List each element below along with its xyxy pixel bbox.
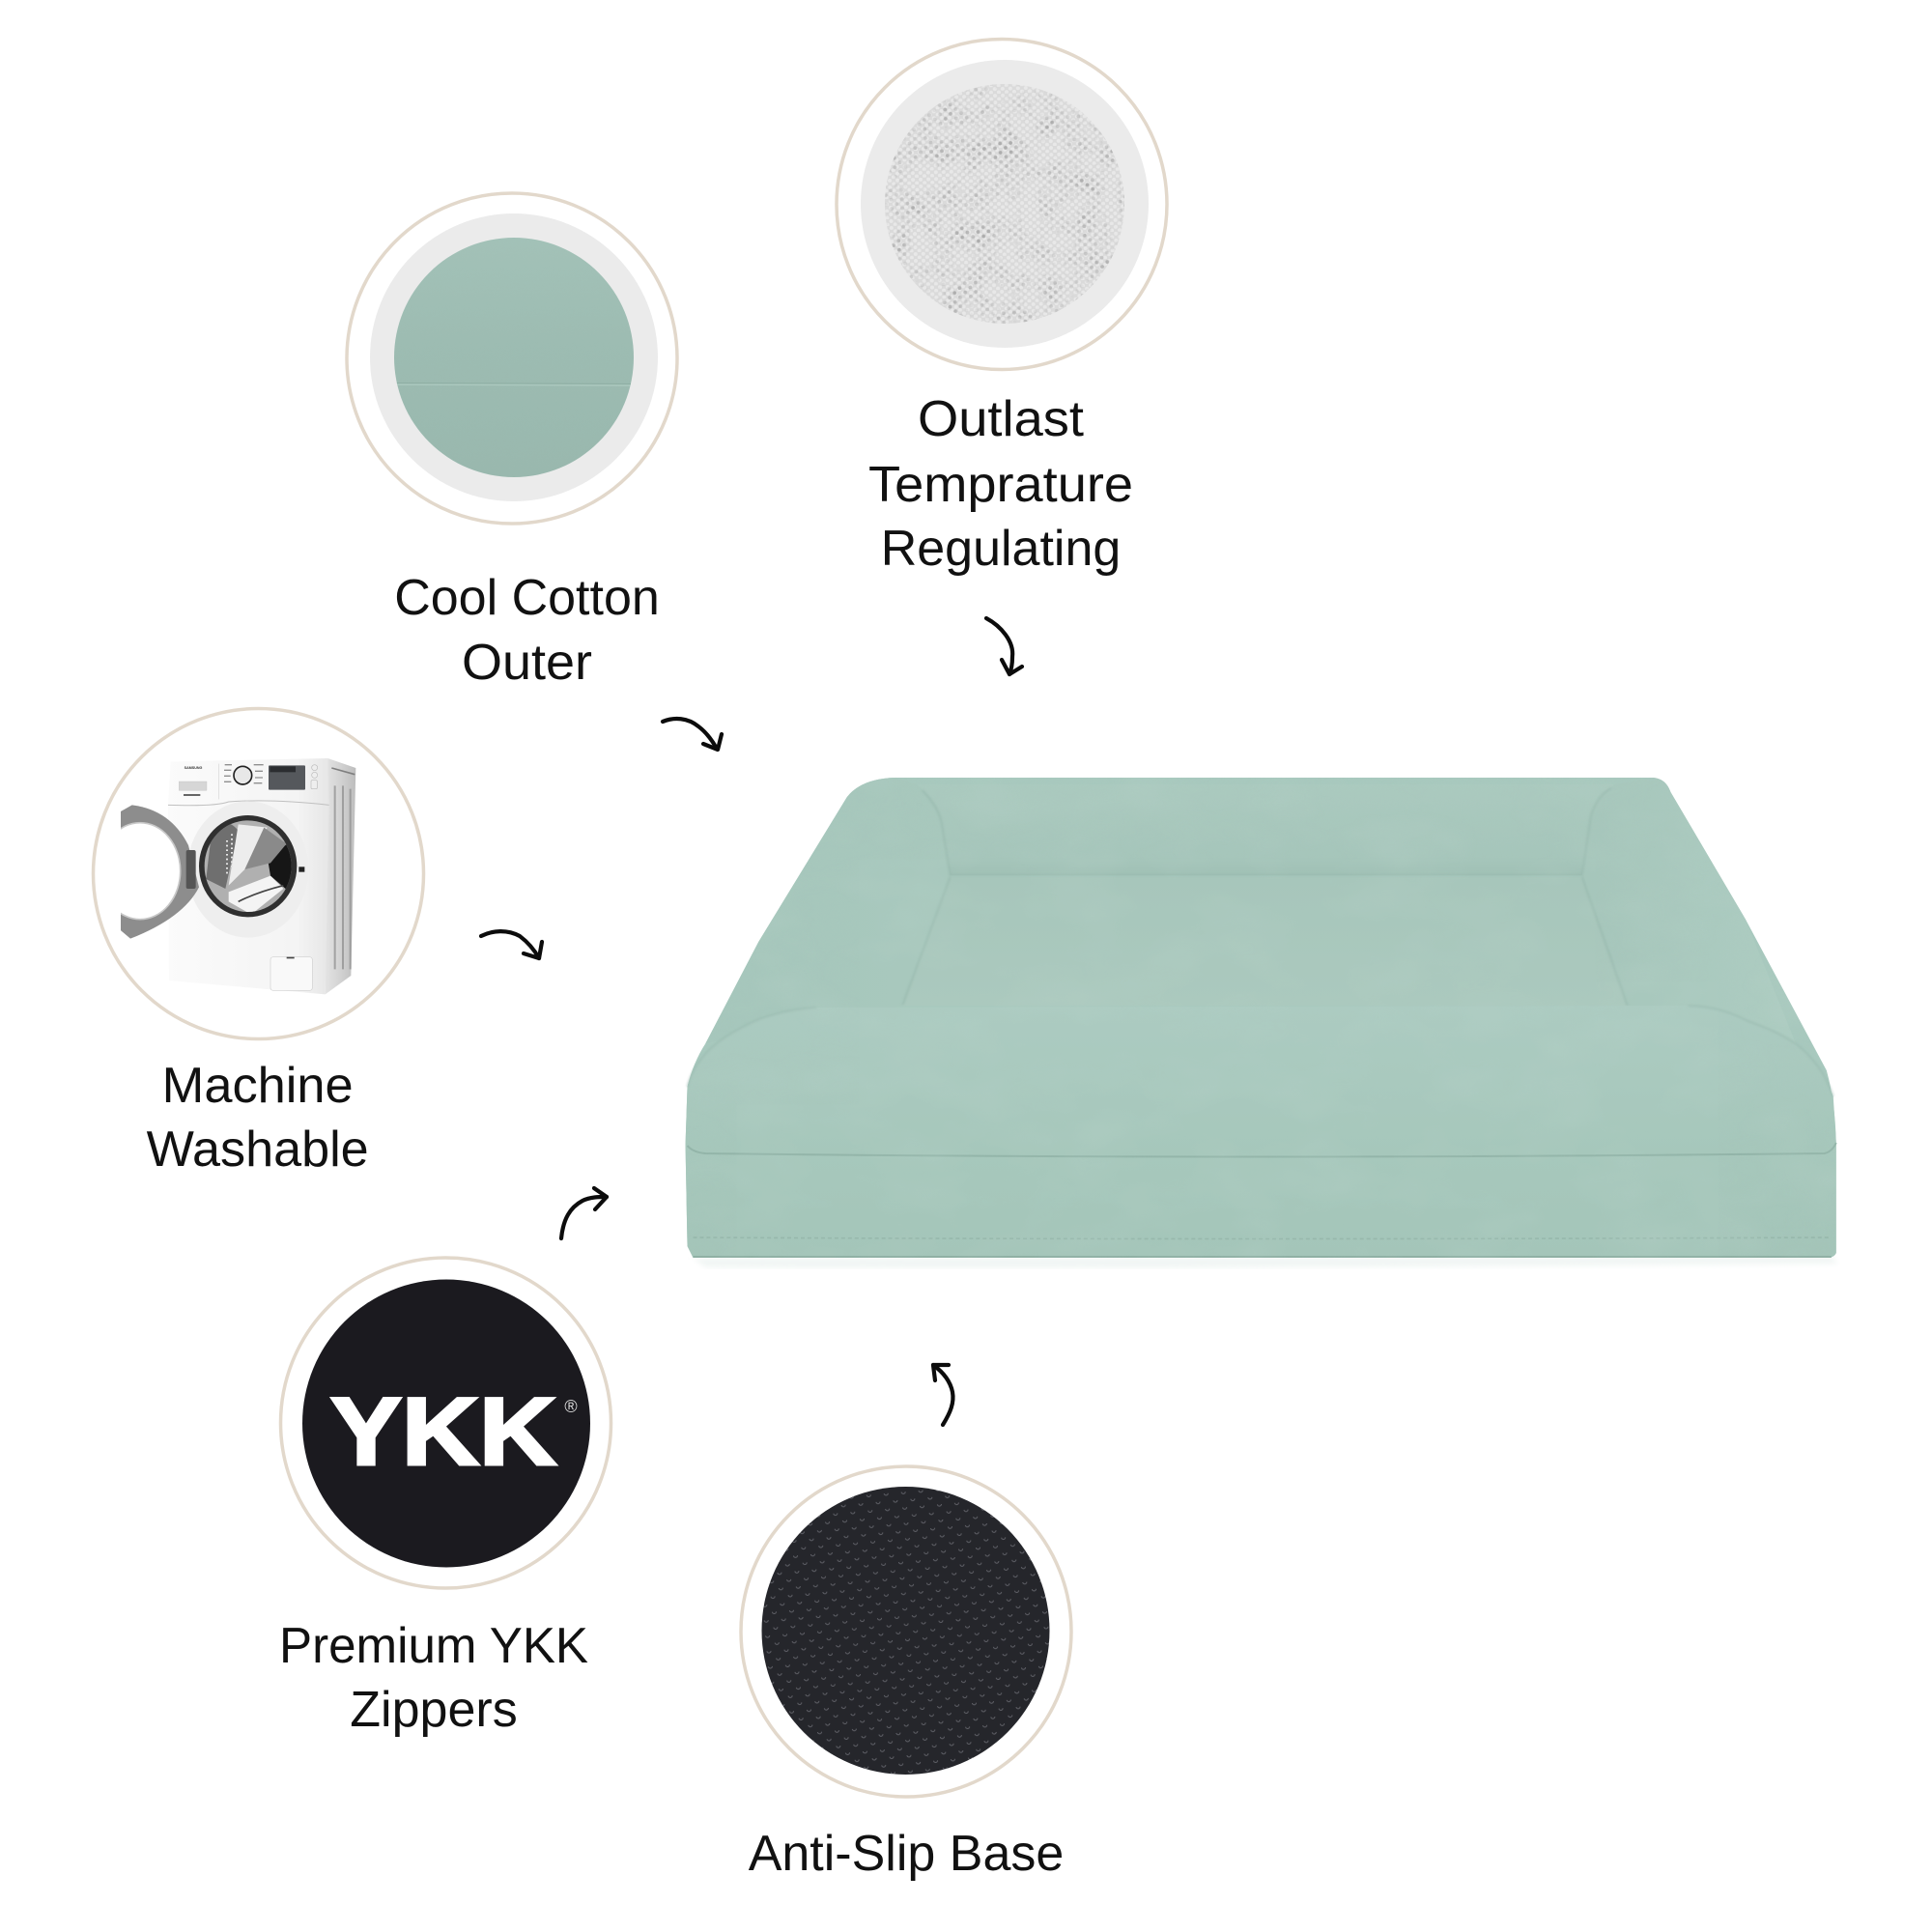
band seam (688, 1143, 1836, 1157)
callout: cool cotton outer (347, 193, 677, 691)
arrow: outlast to bed (986, 618, 1022, 674)
back bolster (918, 784, 1615, 875)
fabric grain (672, 773, 1846, 1265)
arrow: anti-slip to bed (933, 1365, 953, 1425)
icon: washing machine (99, 758, 355, 994)
ring (280, 1258, 611, 1588)
hem stitching (694, 1237, 1832, 1238)
ring (93, 709, 423, 1039)
logo disc (302, 1279, 590, 1567)
arrow: zipper to bed (561, 1188, 607, 1238)
callout: outlast temperature regulating (837, 39, 1167, 577)
icon: woven white fabric swatch (885, 84, 1124, 324)
label: Anti-Slip Base (749, 1826, 1064, 1882)
ring (347, 193, 677, 524)
label line 3: Regulating (881, 521, 1121, 577)
inner edge shadows (903, 788, 1628, 1006)
fabric mottling (672, 773, 1846, 1265)
callout: machine washable (93, 709, 423, 1178)
sleeping surface (903, 877, 1628, 1006)
label line 2: Temprature (868, 457, 1133, 513)
grey disc (370, 213, 658, 501)
icon: mint fabric swatch (394, 238, 634, 477)
icon: washing machine: SAMSUNG (185, 766, 202, 770)
icon: perforated black base swatch (761, 1487, 1049, 1775)
callout: premium YKK zippers (279, 1258, 611, 1738)
label line 2: Outer (462, 635, 592, 691)
label line 2: Zippers (350, 1682, 518, 1738)
right bolster (1582, 778, 1798, 1048)
back crease shadow (950, 873, 1582, 875)
registered mark: ® (564, 1397, 578, 1416)
label line 1: Cool Cotton (394, 570, 660, 626)
bed silhouette (686, 778, 1836, 1258)
label line 1: Machine (162, 1058, 354, 1114)
YKK wordmark: YKK (330, 1378, 556, 1485)
bottom edge (694, 1256, 1832, 1258)
callout: anti-slip base (741, 1466, 1071, 1882)
front bolster (686, 1006, 1836, 1155)
grey disc (861, 60, 1149, 348)
label line 2: Washable (147, 1122, 369, 1178)
bed ground shadow (694, 1256, 1838, 1267)
left bolster (705, 778, 950, 1043)
arrow: machine washable to bed (481, 931, 542, 958)
ring (837, 39, 1167, 369)
product: mint green bed (672, 773, 1846, 1267)
zip base band (686, 1143, 1836, 1258)
ring (741, 1466, 1071, 1797)
arrow: cotton to bed (663, 719, 722, 750)
label line 1: Premium YKK (279, 1618, 588, 1674)
label line 1: Outlast (918, 391, 1085, 447)
front bolster outline (688, 1006, 1833, 1096)
